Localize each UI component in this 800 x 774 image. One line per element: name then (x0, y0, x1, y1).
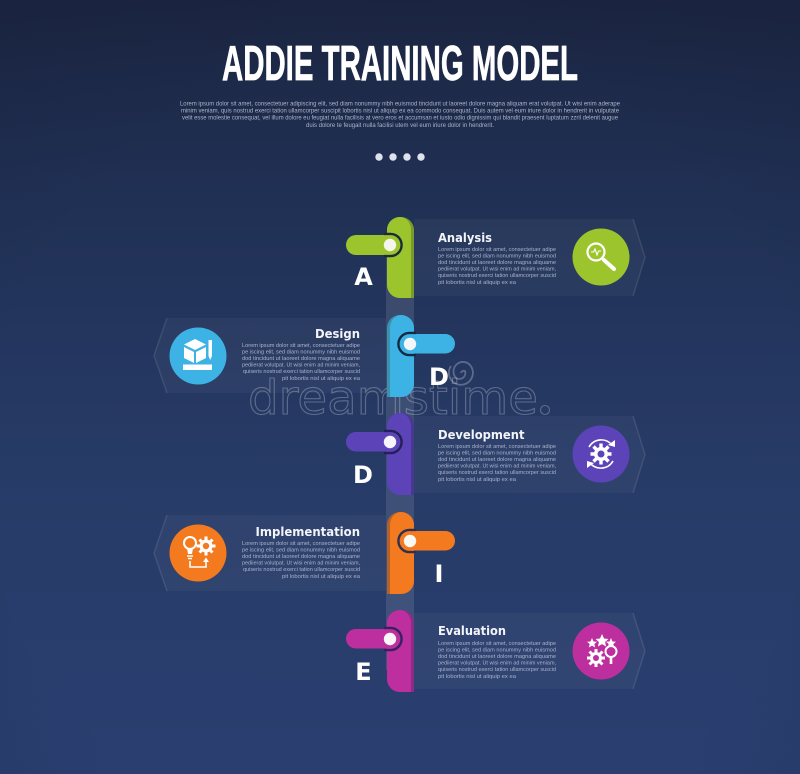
text: Evaluation: dod tincidunt ut laoreet dolore magna aliquame (438, 654, 556, 660)
connector pill: Analysis (346, 234, 402, 256)
vertical bar: Evaluation (387, 610, 414, 692)
text: Design: pe iscing elit, sed diam nonummy nibh euismod (242, 350, 360, 356)
icon: bulb and gear (170, 524, 226, 582)
vertical bar: Implementation (387, 512, 414, 594)
icon: rotating gear (572, 426, 630, 482)
text: Analysis: dod tincidunt ut laoreet dolore magna aliquame (438, 260, 556, 266)
letter A: A (354, 263, 373, 291)
intro paragraph: duis dolore te feugait nulla facilisi utem vel eum iriure dolor in hendrerit. (306, 122, 494, 129)
step 3: Development (346, 413, 645, 495)
connector pill: Implementation (398, 530, 455, 552)
text: Implementation: pediierat volutpat. Ut wisi enim ad minim veniam, (242, 560, 360, 566)
text: Analysis: quiseris nostrud exerci tation ullamcorper suscid (438, 273, 556, 279)
step 2: Design (154, 315, 455, 397)
text: Implementation: dod tincidunt ut laoreet dolore magna aliquame (242, 554, 360, 560)
text: Design: Lorem ipsum dolor sit amet, consectetuer adipe (242, 343, 360, 349)
text: Implementation: Lorem ipsum dolor sit amet, consectetuer adipe (242, 541, 360, 547)
text: Evaluation: pit lobortis nisl ut aliquip ex ea (438, 674, 517, 680)
panel: Evaluation (414, 613, 645, 689)
text: Development: Lorem ipsum dolor sit amet, consectetuer adipe (438, 444, 556, 450)
text: Evaluation: pe iscing elit, sed diam nonummy nibh euismod (438, 648, 556, 654)
heading: Evaluation: Evaluation (438, 624, 506, 638)
step 4: Implementation (154, 512, 455, 594)
vertical bar: Design (387, 315, 414, 397)
text: Development: pit lobortis nisl ut aliquip ex ea (438, 477, 517, 483)
icon: cube and ruler (170, 328, 226, 384)
text: Design: dod tincidunt ut laoreet dolore magna aliquame (242, 356, 360, 362)
text: Analysis (438, 247, 556, 286)
panel: Analysis (414, 219, 645, 296)
panel: Implementation (154, 515, 386, 591)
watermark: dreamstime (248, 371, 538, 426)
text: Implementation: quiseris nostrud exerci tation ullamcorper suscid (243, 567, 360, 573)
icon: stars, gear and key (572, 622, 630, 680)
connector pill: Development (346, 431, 402, 453)
connector pill: Evaluation (346, 628, 402, 650)
text: Implementation: pe iscing elit, sed diam nonummy nibh euismod (242, 548, 360, 554)
text: Development: pediierat volutpat. Ut wisi enim ad minim veniam, (438, 464, 556, 470)
text: Analysis: pe iscing elit, sed diam nonummy nibh euismod (438, 254, 556, 260)
letter I: I (435, 560, 443, 588)
text: Analysis: pit lobortis nisl ut aliquip ex ea (438, 280, 517, 286)
intro paragraph: velit esse molestie consequat, vel illum dolore eu feugiat nulla facilisis at vero eros et accumsan et iusto odio dignissim qui blandit praesent luptatum zzril delenit augue (182, 115, 619, 122)
text: Evaluation: pediierat volutpat. Ut wisi enim ad minim veniam, (438, 660, 556, 666)
text: Implementation (242, 541, 361, 580)
panel: Design (154, 318, 386, 393)
heading: Development: Development (438, 428, 525, 442)
text: Development: quiseris nostrud exerci tation ullamcorper suscid (438, 470, 556, 476)
title: ADDIE TRAINING MODEL (222, 37, 578, 91)
intro paragraph: minim veniam, quis nostrud exerci tation ullamcorper suscipit lobortis nisl ut aliquip ex ea commodo consequat. Duis autem vel eum iriure dolor in hendrerit in vulputate (181, 108, 620, 115)
vertical bar: Development (387, 413, 414, 495)
letter D: D (353, 461, 373, 489)
text: Implementation: pit lobortis nisl ut aliquip ex ea (282, 574, 361, 580)
step 1: Analysis (346, 217, 645, 298)
text: Design (242, 343, 361, 382)
text: Development: dod tincidunt ut laoreet dolore magna aliquame (438, 457, 556, 463)
text: Evaluation (438, 641, 556, 680)
intro paragraph: Lorem ipsum dolor sit amet, consectetuer adipiscing elit, sed diam nonummy nibh euismod tincidunt ut laoreet dolore magna aliquam erat volutpat. Ut wisi enim aderape (180, 100, 621, 108)
heading: Analysis: Analysis (438, 231, 492, 245)
text: Development (438, 444, 556, 483)
intro paragraph (180, 100, 621, 129)
text: Evaluation: quiseris nostrud exerci tation ullamcorper suscid (438, 667, 556, 673)
text: Design: pediierat volutpat. Ut wisi enim ad minim veniam, (242, 362, 360, 368)
pagination dots (375, 153, 425, 161)
heading: Implementation: Implementation (256, 525, 360, 539)
heading: Design: Design (315, 327, 360, 341)
panel: Development (414, 416, 645, 493)
text: Analysis: pediierat volutpat. Ut wisi enim ad minim veniam, (438, 266, 556, 272)
text: Development: pe iscing elit, sed diam nonummy nibh euismod (438, 450, 556, 456)
vertical bar: Analysis (387, 217, 414, 298)
text: Evaluation: Lorem ipsum dolor sit amet, consectetuer adipe (438, 641, 556, 647)
central vertical track (386, 240, 414, 670)
text: Analysis: Lorem ipsum dolor sit amet, consectetuer adipe (438, 247, 556, 253)
step 5: Evaluation (346, 610, 645, 692)
letter D: D (429, 363, 449, 391)
letter E: E (355, 658, 372, 686)
connector pill: Design (398, 333, 455, 355)
icon: magnifier (572, 228, 630, 286)
text: Design: quiseris nostrud exerci tation ullamcorper suscid (243, 369, 360, 375)
text: Design: pit lobortis nisl ut aliquip ex ea (282, 376, 361, 382)
